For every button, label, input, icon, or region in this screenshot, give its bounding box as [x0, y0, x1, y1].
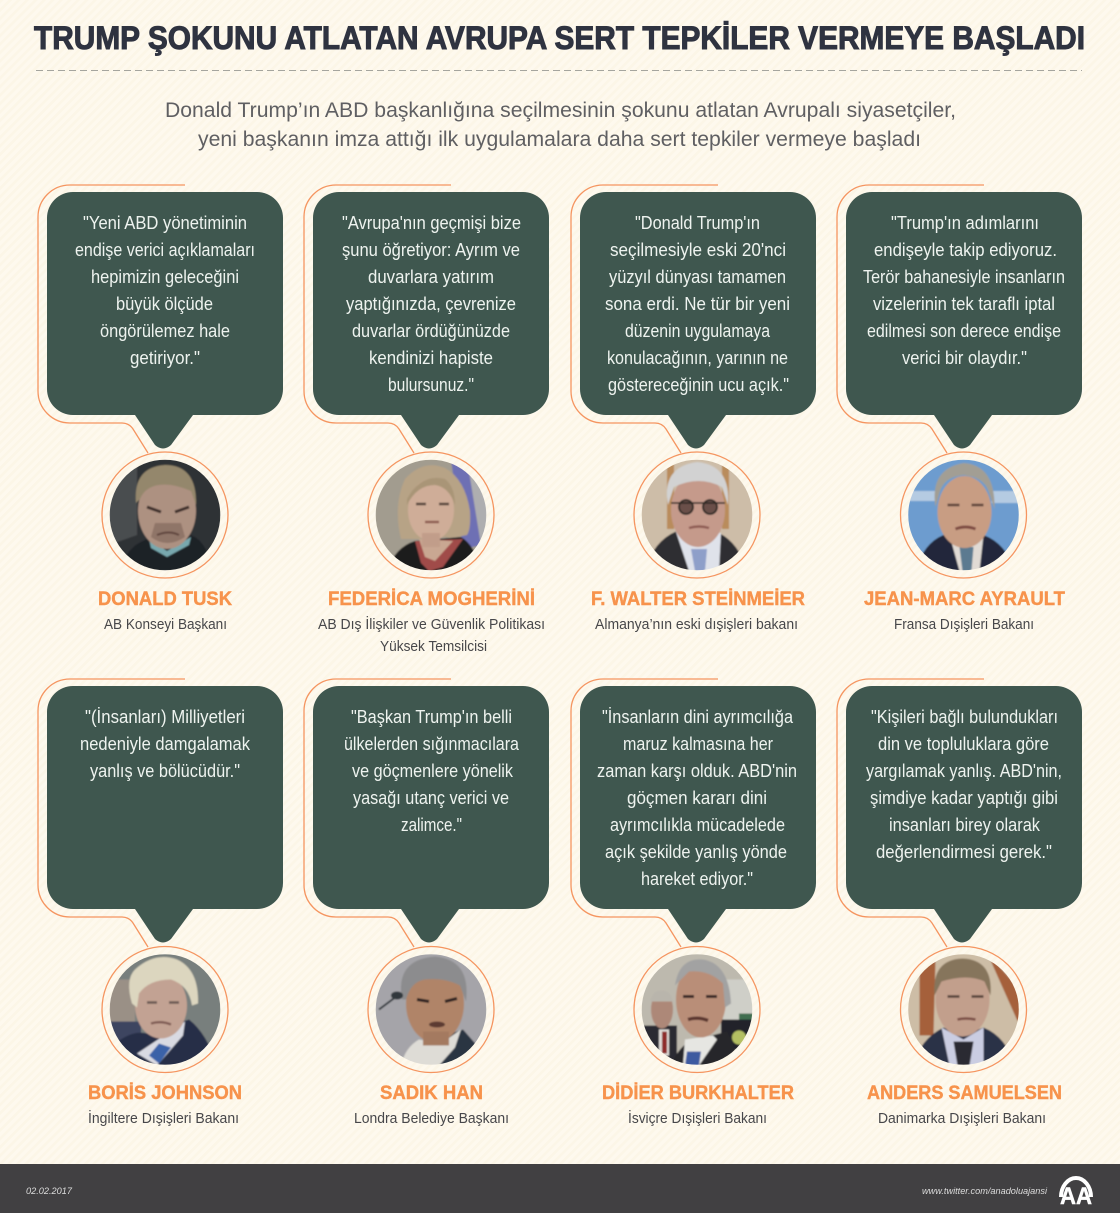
quote: Federica Mogherini: duvarlara yatırım: [368, 266, 494, 287]
quote: Anders Samuelsen: "Kişileri bağlı bulundukları: [871, 706, 1058, 727]
name: Donald Tusk: DONALD TUSK: [98, 589, 232, 610]
quote: Didier Burkhalter: göçmen kararı dini: [627, 787, 767, 808]
quote: Didier Burkhalter: "İnsanların dini ayrımcılığa: [602, 706, 794, 727]
quote: F. Walter Steinmeier: düzenin uygulamaya: [625, 320, 771, 341]
quote: Anders Samuelsen: din ve topluluklara göre: [878, 733, 1049, 754]
quote: Donald Tusk: öngörülemez hale: [100, 320, 230, 341]
portrait: Donald Tusk: [102, 452, 228, 578]
quote: Federica Mogherini: duvarlar ördüğünüzde: [352, 320, 510, 341]
quote: Federica Mogherini: şunu öğretiyor: Ayrım ve: [342, 239, 520, 260]
portrait: Sadik Han: [368, 946, 494, 1072]
quote: F. Walter Steinmeier: göstereceğinin ucu açık.": [608, 374, 789, 395]
quote: Anders Samuelsen: değerlendirmesi gerek.": [876, 841, 1052, 862]
quote: Anders Samuelsen: [866, 706, 1062, 862]
quote: Donald Tusk: getiriyor.": [130, 347, 200, 368]
quote: Donald Tusk: endişe verici açıklamaları: [75, 239, 255, 260]
role: Didier Burkhalter: İsviçre Dışişleri Bakanı: [628, 1109, 767, 1127]
role: Jean-Marc Ayrault: Fransa Dışişleri Bakanı: [894, 616, 1034, 633]
quote: F. Walter Steinmeier: sona erdi. Ne tür bir yeni: [605, 293, 790, 314]
name: Didier Burkhalter: DİDİER BURKHALTER: [602, 1083, 794, 1104]
quote: Didier Burkhalter: zaman karşı olduk. ABD'nin: [597, 760, 797, 781]
role: Anders Samuelsen: Danimarka Dışişleri Bakanı: [878, 1110, 1046, 1127]
speech bubble: F. Walter Steinmeier: [580, 192, 816, 448]
quote: Sadik Han: [344, 706, 520, 835]
date: 02.02.2017: [26, 1186, 73, 1197]
quote: Donald Tusk: [75, 212, 255, 368]
role: Sadik Han: Londra Belediye Başkanı: [354, 1110, 509, 1127]
portrait: Federica Mogherini: [368, 452, 494, 578]
quote: Federica Mogherini: bulursunuz.": [388, 374, 474, 395]
quote: Boris Johnson: [80, 706, 251, 781]
portrait: Anders Samuelsen: [900, 946, 1026, 1072]
quote: Jean-Marc Ayrault: "Trump'ın adımlarını: [891, 212, 1039, 233]
quote: Didier Burkhalter: ayrımcılıkla mücadelede: [610, 814, 785, 835]
quote: Sadik Han: yasağı utanç verici ve: [353, 787, 509, 808]
quote: Sadik Han: ve göçmenlere yönelik: [352, 760, 514, 781]
intro text: [165, 99, 956, 151]
role: Boris Johnson: İngiltere Dışişleri Bakanı: [88, 1109, 239, 1127]
quote: Federica Mogherini: [342, 212, 521, 395]
speech bubble: Donald Tusk: [47, 192, 283, 448]
portrait: Boris Johnson: [102, 946, 228, 1072]
panel: Anders Samuelsen: [837, 679, 1082, 1127]
quote: Anders Samuelsen: şimdiye kadar yaptığı gibi: [870, 787, 1058, 808]
quote: Sadik Han: "Başkan Trump'ın belli: [351, 706, 512, 727]
quote: F. Walter Steinmeier: "Donald Trump'ın: [635, 212, 760, 233]
quote: Didier Burkhalter: hareket ediyor.": [641, 868, 753, 889]
panel: Sadik Han: [304, 679, 549, 1127]
quote: Jean-Marc Ayrault: verici bir olaydır.": [902, 347, 1027, 368]
portrait: Jean-Marc Ayrault: [900, 452, 1026, 578]
speech bubble: Boris Johnson: [47, 686, 283, 942]
quote: Didier Burkhalter: maruz kalmasına her: [623, 733, 773, 754]
quote: Jean-Marc Ayrault: Terör bahanesiyle insanların: [863, 266, 1065, 287]
quote: Donald Tusk: hepimizin geleceğini: [91, 266, 239, 287]
quote: F. Walter Steinmeier: konulacağının, yarının ne: [607, 347, 788, 368]
panel: F. Walter Steinmeier: [571, 185, 816, 633]
quote: Boris Johnson: "(İnsanları) Milliyetleri: [85, 706, 245, 727]
name: Federica Mogherini: FEDERİCA MOGHERİNİ: [328, 589, 535, 610]
intro text: Donald Trump’ın ABD başkanlığına seçilmesinin şokunu atlatan Avrupalı siyasetçiler,: [165, 99, 956, 122]
panel: Federica Mogherini: [304, 185, 549, 655]
role: F. Walter Steinmeier: Almanya’nın eski dışişleri bakanı: [595, 616, 798, 633]
intro text: yeni başkanın imza attığı ilk uygulamalara daha sert tepkiler vermeye başladı: [198, 128, 921, 151]
role: Federica Mogherini: [318, 615, 545, 655]
quote: F. Walter Steinmeier: yüzyıl dünyası tamamen: [609, 266, 786, 287]
speech bubble: Sadik Han: [313, 686, 549, 942]
quote: Didier Burkhalter: [597, 706, 797, 889]
quote: Jean-Marc Ayrault: vizelerinin tek taraflı iptal: [873, 293, 1055, 314]
quote: Federica Mogherini: kendinizi hapiste: [369, 347, 493, 368]
name: Sadik Han: SADIK HAN: [380, 1083, 483, 1104]
speech bubble: Jean-Marc Ayrault: [846, 192, 1082, 448]
quote: Federica Mogherini: "Avrupa'nın geçmişi bize: [342, 212, 521, 233]
speech bubble: Didier Burkhalter: [580, 686, 816, 942]
quote: Jean-Marc Ayrault: endişeyle takip ediyoruz.: [874, 239, 1057, 260]
role: Donald Tusk: AB Konseyi Başkanı: [104, 616, 227, 633]
quote: F. Walter Steinmeier: seçilmesiyle eski 20'nci: [610, 239, 786, 260]
quote: Donald Tusk: "Yeni ABD yönetiminin: [83, 212, 247, 233]
role: Federica Mogherini: Yüksek Temsilcisi: [380, 638, 487, 655]
quote: Jean-Marc Ayrault: edilmesi son derece endişe: [867, 320, 1061, 341]
portrait: Didier Burkhalter: [634, 946, 760, 1072]
quote: Boris Johnson: yanlış ve bölücüdür.": [90, 760, 240, 781]
quote: F. Walter Steinmeier: [605, 212, 790, 395]
panel: Jean-Marc Ayrault: [837, 185, 1082, 633]
quote: Donald Tusk: büyük ölçüde: [116, 293, 213, 314]
quote: Anders Samuelsen: insanları birey olarak: [889, 814, 1041, 835]
speech bubble: Federica Mogherini: [313, 192, 549, 448]
quote: Anders Samuelsen: yargılamak yanlış. ABD'nin,: [866, 760, 1062, 781]
footer bar: [0, 1164, 1120, 1213]
portrait: F. Walter Steinmeier: [634, 452, 760, 578]
quote: Jean-Marc Ayrault: [863, 212, 1065, 368]
role: Federica Mogherini: AB Dış İlişkiler ve Güvenlik Politikası: [318, 615, 545, 633]
name: F. Walter Steinmeier: F. WALTER STEİNMEİER: [591, 589, 805, 610]
quote: Federica Mogherini: yaptığınızda, çevrenize: [346, 293, 516, 314]
name: Boris Johnson: BORİS JOHNSON: [88, 1083, 242, 1104]
quote: Didier Burkhalter: açık şekilde yanlış yönde: [605, 841, 787, 862]
speech bubble: Anders Samuelsen: [846, 686, 1082, 942]
quote: Sadik Han: zalimce.": [401, 814, 462, 835]
name: Anders Samuelsen: ANDERS SAMUELSEN: [867, 1083, 1062, 1104]
social link: www.twitter.com/anadoluajansi: [922, 1186, 1048, 1197]
panel: Donald Tusk: [38, 185, 283, 633]
quote: Sadik Han: ülkelerden sığınmacılara: [344, 733, 520, 754]
panel: Boris Johnson: [38, 679, 283, 1127]
icon: Anadolu Agency logo: AA: [1060, 1183, 1092, 1210]
panel: Didier Burkhalter: [571, 679, 816, 1127]
name: Jean-Marc Ayrault: JEAN-MARC AYRAULT: [864, 589, 1065, 610]
quote: Boris Johnson: nedeniyle damgalamak: [80, 733, 251, 754]
